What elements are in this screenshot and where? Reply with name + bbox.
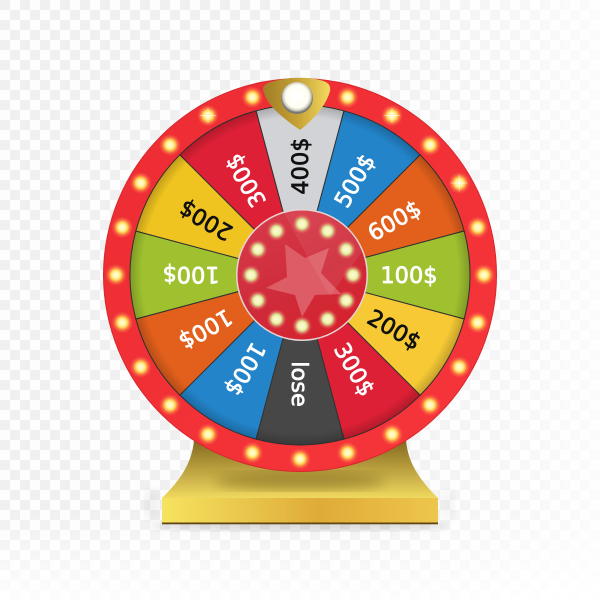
segment: 300$ red left: 300$: [221, 149, 272, 211]
bulb sparkles: [200, 108, 467, 191]
centre hub: [236, 209, 368, 341]
segment: 200$ yellow: 200$: [363, 305, 425, 356]
segment: 100$ green left: [130, 231, 300, 319]
inner rim shadow: [130, 105, 470, 445]
segment: 100$ green left: 100$: [162, 261, 220, 287]
hub star: [266, 244, 341, 317]
segment: 100$ green: 100$: [380, 263, 438, 289]
segment: 300$ red: [262, 253, 423, 444]
segment: lose dark: lose: [286, 361, 312, 407]
hub bulbs: [241, 214, 363, 336]
segment: 400$ grey: [256, 105, 344, 275]
pointer gem: [281, 82, 313, 114]
segment: 300$ red: 300$: [328, 339, 379, 401]
wheel segments: [130, 105, 470, 445]
segment: 100$ blue: [177, 253, 338, 444]
segment: 100$ orange: [131, 237, 322, 398]
segment: 300$ red left: [177, 106, 338, 297]
segment: 100$ green: [300, 231, 470, 319]
segment: 600$ orange: 600$: [364, 196, 426, 247]
segment: 200$ yellow: [278, 237, 469, 398]
segment: 200$ yellow left: [131, 152, 322, 313]
segment: 600$ orange: [278, 152, 469, 313]
segment: 100$ orange: 100$: [174, 303, 236, 354]
hub highlight: [284, 210, 362, 296]
segment: 100$ blue: 100$: [219, 338, 270, 400]
segment: 500$ blue: [262, 106, 423, 297]
segment: 400$ grey: 400$: [288, 137, 314, 195]
wheel outer red ring: [103, 78, 497, 472]
gold pointer with gem: [263, 78, 330, 130]
segment: 500$ blue: 500$: [330, 150, 381, 212]
segment: lose dark: [256, 275, 344, 445]
stand: gold base: [145, 440, 454, 531]
segment: 200$ yellow left: 200$: [175, 194, 237, 245]
ring bulbs: [105, 86, 495, 470]
